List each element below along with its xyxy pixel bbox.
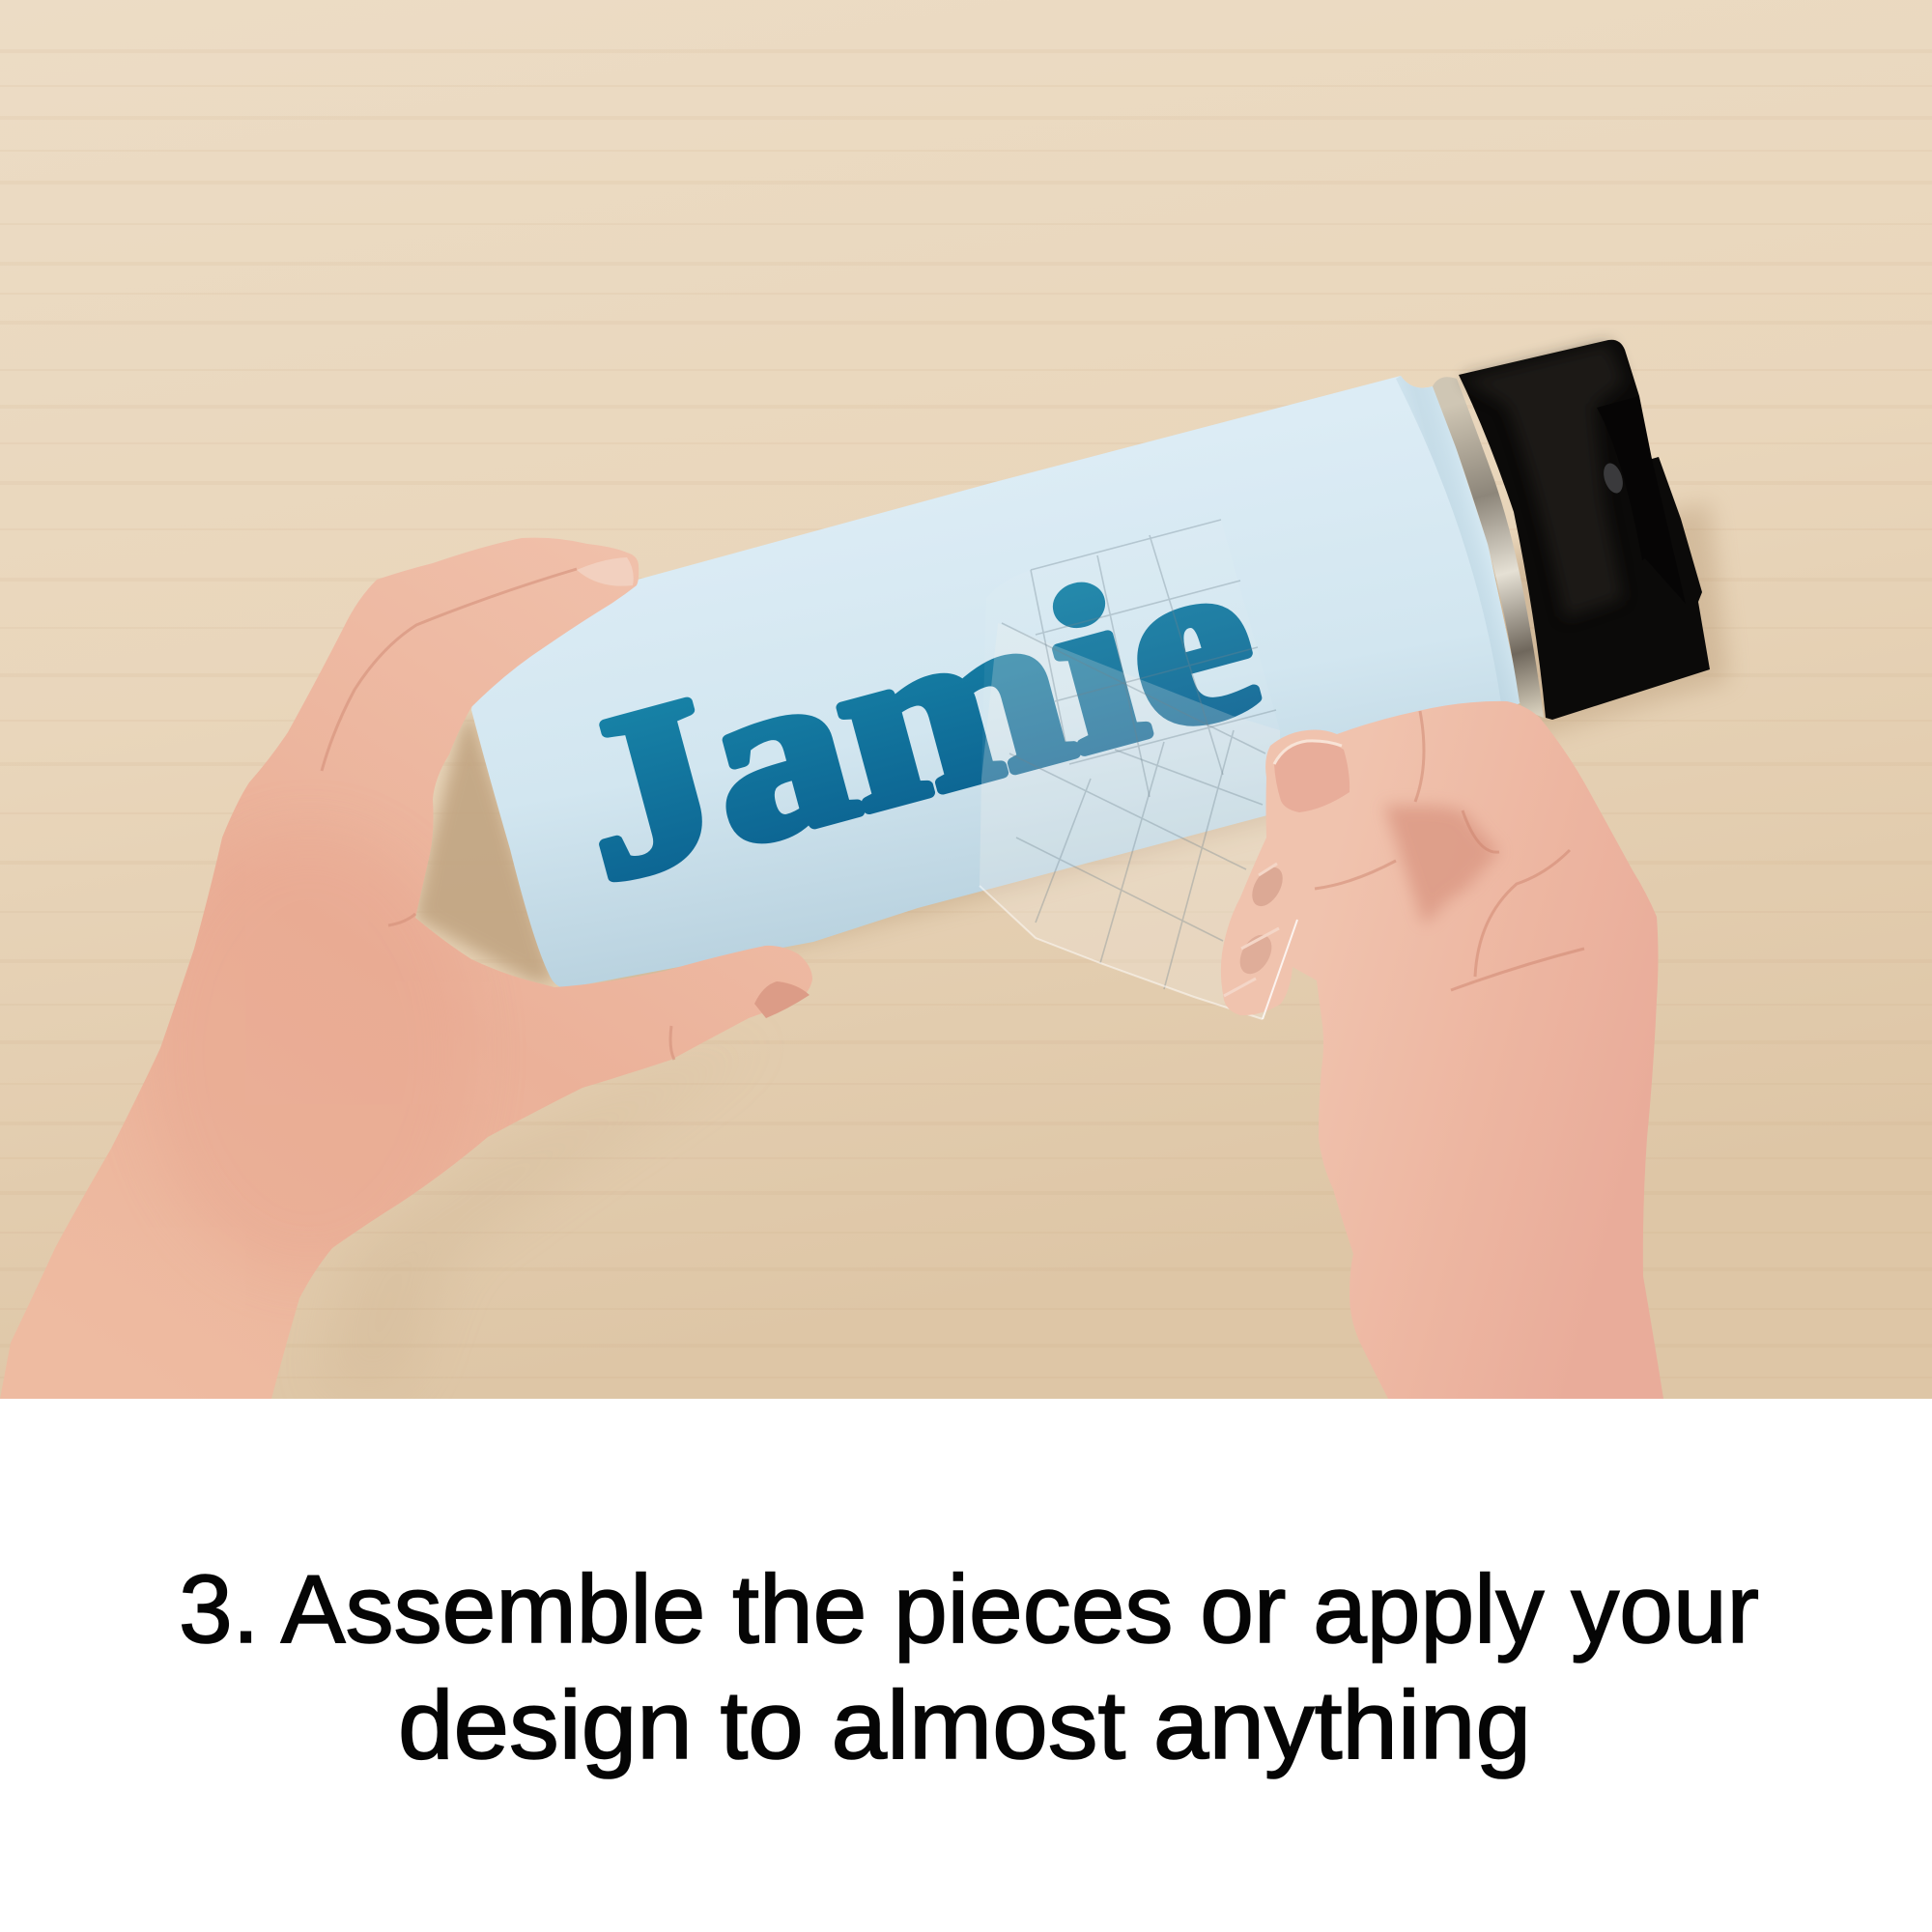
film peeled fold [980, 623, 1280, 1019]
transparent transfer film with grid [980, 520, 1280, 1019]
bottle neck shading [1396, 376, 1521, 710]
caption heading: design to almost anything [398, 1671, 1531, 1779]
right hand [1221, 701, 1663, 1399]
thumb nail [1274, 741, 1350, 812]
film bright edge [980, 886, 1263, 1019]
left hand creases [322, 569, 674, 1060]
black cap [1459, 340, 1710, 720]
film thin edge over fingers [1263, 920, 1297, 1019]
water bottle [471, 340, 1710, 988]
caption heading: 3. Assemble the pieces or apply your [179, 1555, 1759, 1663]
vinyl lettering: Jamie: Jamie [550, 505, 1280, 929]
film grid lines [1002, 520, 1276, 989]
right hand finger fold shadow [1384, 806, 1499, 925]
left hand redness patch [145, 831, 473, 1275]
wood table photo background [0, 0, 1932, 1399]
metal neck ring [1433, 377, 1544, 718]
soft shadow beneath bottle and hands [415, 422, 1733, 986]
bottle body [471, 376, 1521, 988]
thumb nail white tip [1274, 741, 1342, 764]
right hand creases [1315, 711, 1584, 990]
fingertip nails behind film [1224, 862, 1289, 996]
caption heading [179, 1555, 1759, 1779]
left hand [0, 538, 812, 1399]
film sheet upper [980, 520, 1280, 1019]
cap upper sheen [1462, 343, 1625, 618]
left thumb nail [754, 981, 810, 1018]
cap recess and button [1597, 396, 1686, 604]
left hand fingertip nail [577, 557, 634, 586]
